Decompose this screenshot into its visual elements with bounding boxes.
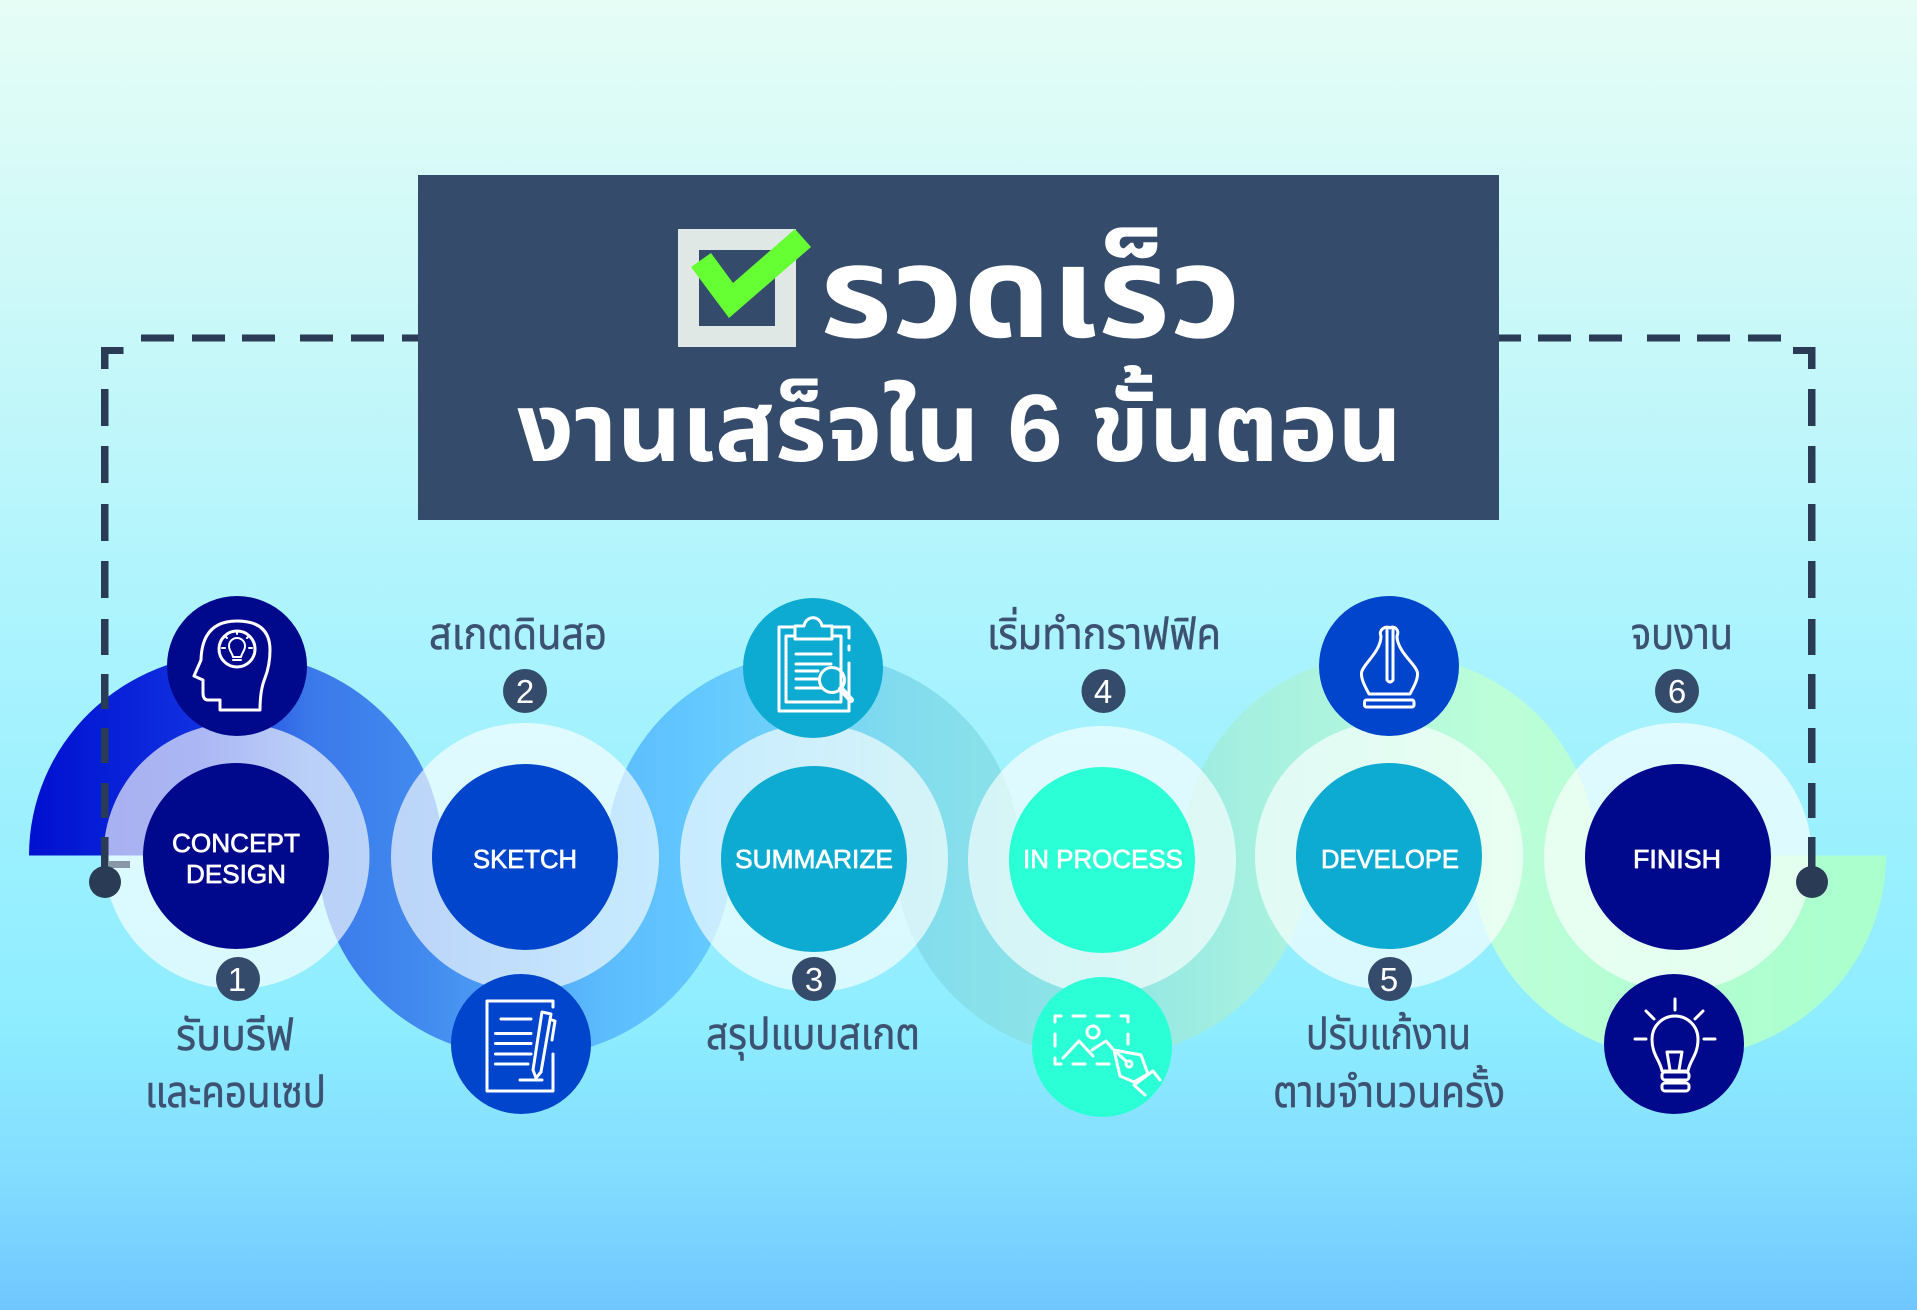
step 5 thai caption bbox=[1273, 1010, 1505, 1117]
title panel bbox=[418, 175, 1499, 520]
step 4 english label: IN PROCESS bbox=[1023, 846, 1183, 874]
icon: clipboard and magnifier bbox=[743, 598, 883, 738]
title line 1: รวดเร็ว bbox=[820, 222, 1241, 365]
step 5 thai caption: ปรับแก้งาน bbox=[1306, 1010, 1471, 1059]
step 1 english label: DESIGN bbox=[186, 861, 286, 889]
dashed connector with end dots bbox=[89, 334, 1828, 898]
step 5: develope bbox=[1255, 596, 1523, 1117]
step 6 thai caption: จบงาน bbox=[1631, 610, 1733, 659]
icon: fountain pen nib bbox=[1319, 596, 1459, 736]
step 5 number badge bbox=[1368, 957, 1412, 1001]
step 1 thai caption: รับบรีฟ bbox=[176, 1011, 294, 1060]
icon: document and pen bbox=[451, 974, 591, 1114]
step 3 number badge: 3 bbox=[805, 961, 823, 998]
step 5 english label: DEVELOPE bbox=[1321, 846, 1459, 874]
step 2 number badge: 2 bbox=[516, 673, 534, 710]
step 1 thai caption bbox=[145, 1011, 326, 1117]
step 4: in process bbox=[968, 607, 1236, 1117]
icon: green check in box bbox=[678, 229, 811, 347]
flowing semicircle wave bbox=[29, 654, 1886, 1058]
step 4 main circle bbox=[1009, 767, 1195, 953]
step 1 number badge: 1 bbox=[228, 961, 246, 998]
step 1 main circle bbox=[143, 763, 329, 949]
step 3 english label: SUMMARIZE bbox=[735, 846, 893, 874]
step 5 thai caption: ตามจำนวนครั้ง bbox=[1273, 1065, 1505, 1117]
step 1 english label: CONCEPT bbox=[172, 830, 300, 858]
step 6 english label: FINISH bbox=[1633, 846, 1721, 874]
step 1: concept design bbox=[104, 596, 370, 1117]
title line 2: งานเสร็จใน 6 ขั้นตอน bbox=[517, 364, 1402, 482]
step 3: summarize bbox=[680, 598, 948, 1061]
step 2 english label: SKETCH bbox=[473, 846, 577, 874]
step 2 number badge bbox=[503, 669, 547, 713]
step 5 number badge: 5 bbox=[1380, 961, 1398, 998]
icon: lightbulb bbox=[1604, 974, 1744, 1114]
step 3 thai caption: สรุปแบบสเกต bbox=[706, 1010, 920, 1061]
step 1 number badge bbox=[216, 957, 260, 1001]
step 6 number badge: 6 bbox=[1668, 673, 1686, 710]
step 6: finish bbox=[1544, 610, 1812, 1114]
step 2: sketch bbox=[391, 610, 659, 1114]
step 4 number badge: 4 bbox=[1094, 673, 1112, 710]
step 2 main circle bbox=[432, 764, 618, 950]
step 6 number badge bbox=[1655, 669, 1699, 713]
step 5 main circle bbox=[1296, 763, 1482, 949]
step 4 thai caption: เริ่มทำกราฟฟิค bbox=[987, 607, 1221, 659]
step 1 english label bbox=[172, 830, 300, 889]
step 2 thai caption: สเกตดินสอ bbox=[429, 610, 607, 659]
step 6 main circle bbox=[1585, 764, 1771, 950]
icon: head with lightbulb bbox=[167, 596, 307, 736]
icon: image frame and pen nib bbox=[1032, 977, 1172, 1117]
step 3 number badge bbox=[792, 957, 836, 1001]
step 3 main circle bbox=[721, 766, 907, 952]
step 4 number badge bbox=[1082, 669, 1126, 713]
step 1 thai caption: และคอนเซป bbox=[145, 1068, 326, 1117]
